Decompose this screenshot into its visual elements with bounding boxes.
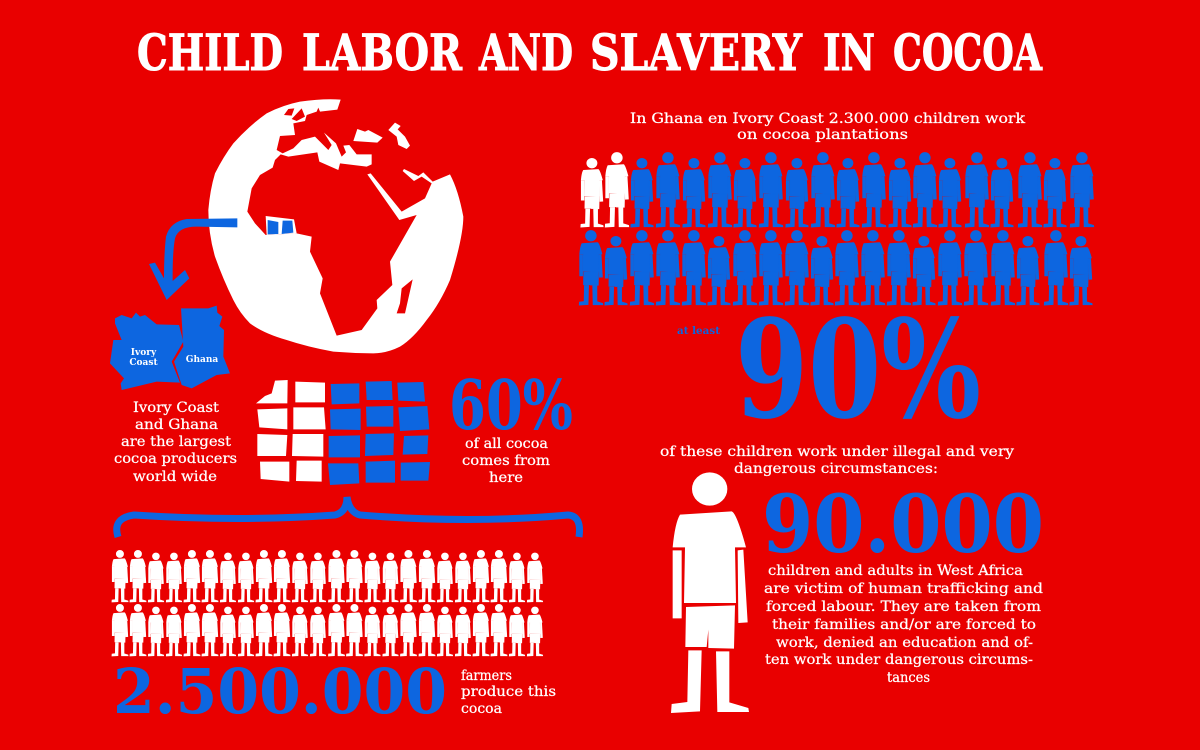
text: of all cocoa [462,436,550,486]
islands [353,123,410,149]
title: AND [478,23,573,82]
label: Ivory Coast: Ivory [131,348,157,358]
arrow [149,218,237,300]
text: farmers produce this cocoa [461,668,556,717]
text: of all cocoa: of all cocoa [465,436,548,452]
text: trafficking paragraph: tances [887,670,930,686]
stat: 90.000: 90.000 [762,477,1044,571]
text: illegal circumstances: of these children work under illegal and very [660,444,1014,460]
text: children on plantations: In Ghana en Ivory Coast 2.300.000 children work [630,111,1026,127]
chart: 60 percent tile grid [256,380,430,485]
text: largest producers: Ivory Coast [133,400,219,416]
text: illegal circumstances: dangerous circumstances: [734,461,938,477]
globe illustration [110,99,463,390]
text: largest producers: are the largest [121,434,231,450]
text: trafficking paragraph: ten work under dangerous circums- [765,652,1033,668]
label: Ivory Coast: Coast [129,358,158,368]
text: farmers produce this cocoa: produce this [461,684,556,700]
row 2 [112,604,543,656]
text: of all cocoa: here [489,470,523,486]
red inland details [284,108,413,313]
Ghana and Ivory Coast highlight [266,216,297,235]
children pictogram [579,153,1094,305]
brace [117,497,580,537]
white children [581,153,629,227]
text: largest producers [114,400,237,485]
blue children row 2 [579,231,1092,305]
text: largest producers: world wide [133,469,217,485]
text: children on plantations [630,111,1026,143]
text: largest producers: and Ghana [135,417,218,433]
text: trafficking paragraph: work, denied an education and of- [776,635,1033,651]
title: LABOR [302,23,462,82]
globe landmass [208,99,463,353]
text: trafficking paragraph [764,563,1043,686]
stat: 60%: 60% [449,366,573,446]
text: of all cocoa: comes from [462,453,550,469]
title: COCOA [893,23,1043,82]
text: children on plantations: on cocoa plantations [737,127,908,143]
text: farmers produce this cocoa: farmers [461,668,512,684]
blue children row 1 [631,153,1094,227]
title: CHILD [137,23,283,82]
farmers pictogram [112,550,543,656]
text: trafficking paragraph: forced labour. They are taken from [766,599,1041,615]
title: IN [823,23,875,82]
stat: 90%: 90% [735,290,981,450]
text: trafficking paragraph: their families and/or are forced to [772,617,1036,633]
blue tiles [328,381,430,485]
white tiles [256,380,326,482]
title: SLAVERY [590,23,803,82]
Ghana map [174,306,230,388]
row 1 [112,550,543,602]
label: at least: at least [677,326,720,337]
stat: 2.500.000: 2.500.000 [113,655,447,728]
text: illegal circumstances [660,444,1014,477]
Ivory Coast map [110,313,183,390]
text: farmers produce this cocoa: cocoa [461,701,502,717]
icon: large child figure [671,472,749,713]
text: trafficking paragraph: are victim of human trafficking and [764,581,1043,597]
text: trafficking paragraph: children and adults in West Africa [768,563,1023,579]
title [137,23,1043,82]
text: largest producers: cocoa producers [114,451,237,467]
label: Ghana: Ghana [186,355,218,365]
